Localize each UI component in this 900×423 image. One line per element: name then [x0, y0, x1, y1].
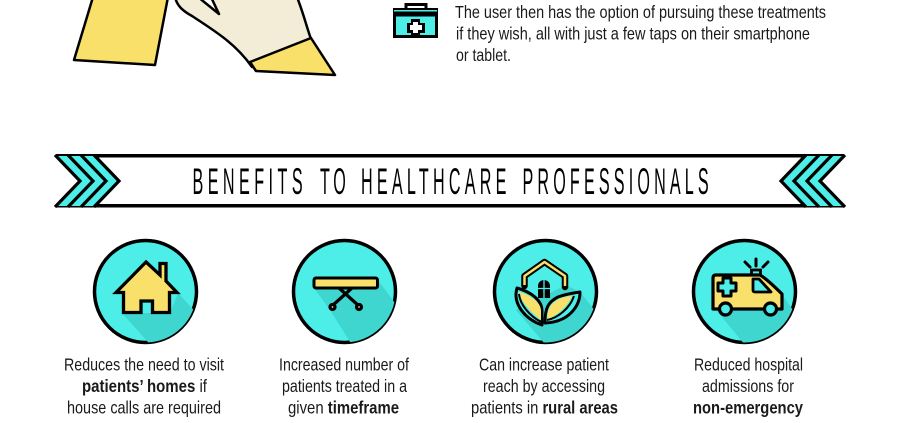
cream hand	[175, 0, 311, 67]
text: benefit 4: Reduced hospital	[694, 354, 803, 374]
icon: medical kit	[393, 4, 438, 36]
banner title: PROFESSIONALS	[522, 162, 709, 203]
banner title	[192, 162, 709, 203]
text: benefit 2	[279, 354, 409, 418]
text: benefit 4: non-emergency	[693, 398, 803, 418]
benefit 3: rural reach	[471, 240, 618, 418]
banner	[55, 154, 845, 208]
text: benefit 3: Can increase patient	[479, 354, 609, 374]
icon: house with leaves	[494, 240, 604, 350]
banner title: TO	[320, 162, 346, 203]
icon: house	[94, 240, 205, 350]
right chevrons	[781, 155, 845, 207]
left yellow sleeve	[74, 0, 168, 65]
banner title: BENEFITS	[192, 162, 303, 203]
text: benefit 2: patients treated in a	[282, 376, 407, 396]
text: benefit 1: Reduces the need to visit	[64, 354, 224, 374]
yellow cuff	[250, 38, 335, 75]
icon: treatment bed	[294, 240, 400, 345]
text: benefit 3: reach by accessing	[483, 376, 605, 396]
text: benefit 1	[64, 354, 224, 418]
illustration: sleeve and hand	[74, 0, 335, 75]
benefit 2: patients treated	[279, 240, 409, 418]
text: benefit 2: given timeframe	[288, 398, 399, 418]
text: benefit 4: admissions for	[702, 376, 794, 396]
text: treatments paragraph: if they wish, all with just a few taps on their smartphone	[456, 24, 810, 44]
text: benefit 1: house calls are required	[67, 398, 221, 418]
text: benefit 2: Increased number of	[279, 354, 409, 374]
text: treatments paragraph: The user then has the option of pursuing these treatments	[455, 2, 826, 22]
text: benefit 4	[693, 354, 803, 418]
text: treatments paragraph	[455, 2, 826, 65]
benefit 1: home visits	[64, 240, 224, 418]
benefit 4: ambulance	[693, 240, 803, 418]
left chevrons	[55, 155, 119, 207]
banner title: HEALTHCARE	[361, 162, 506, 203]
text: benefit 3	[471, 354, 618, 418]
text: treatments paragraph: or tablet.	[456, 45, 511, 65]
text: benefit 3: patients in rural areas	[471, 398, 618, 418]
icon: ambulance	[694, 240, 800, 345]
text: benefit 1: patients’ homes if	[82, 376, 207, 396]
